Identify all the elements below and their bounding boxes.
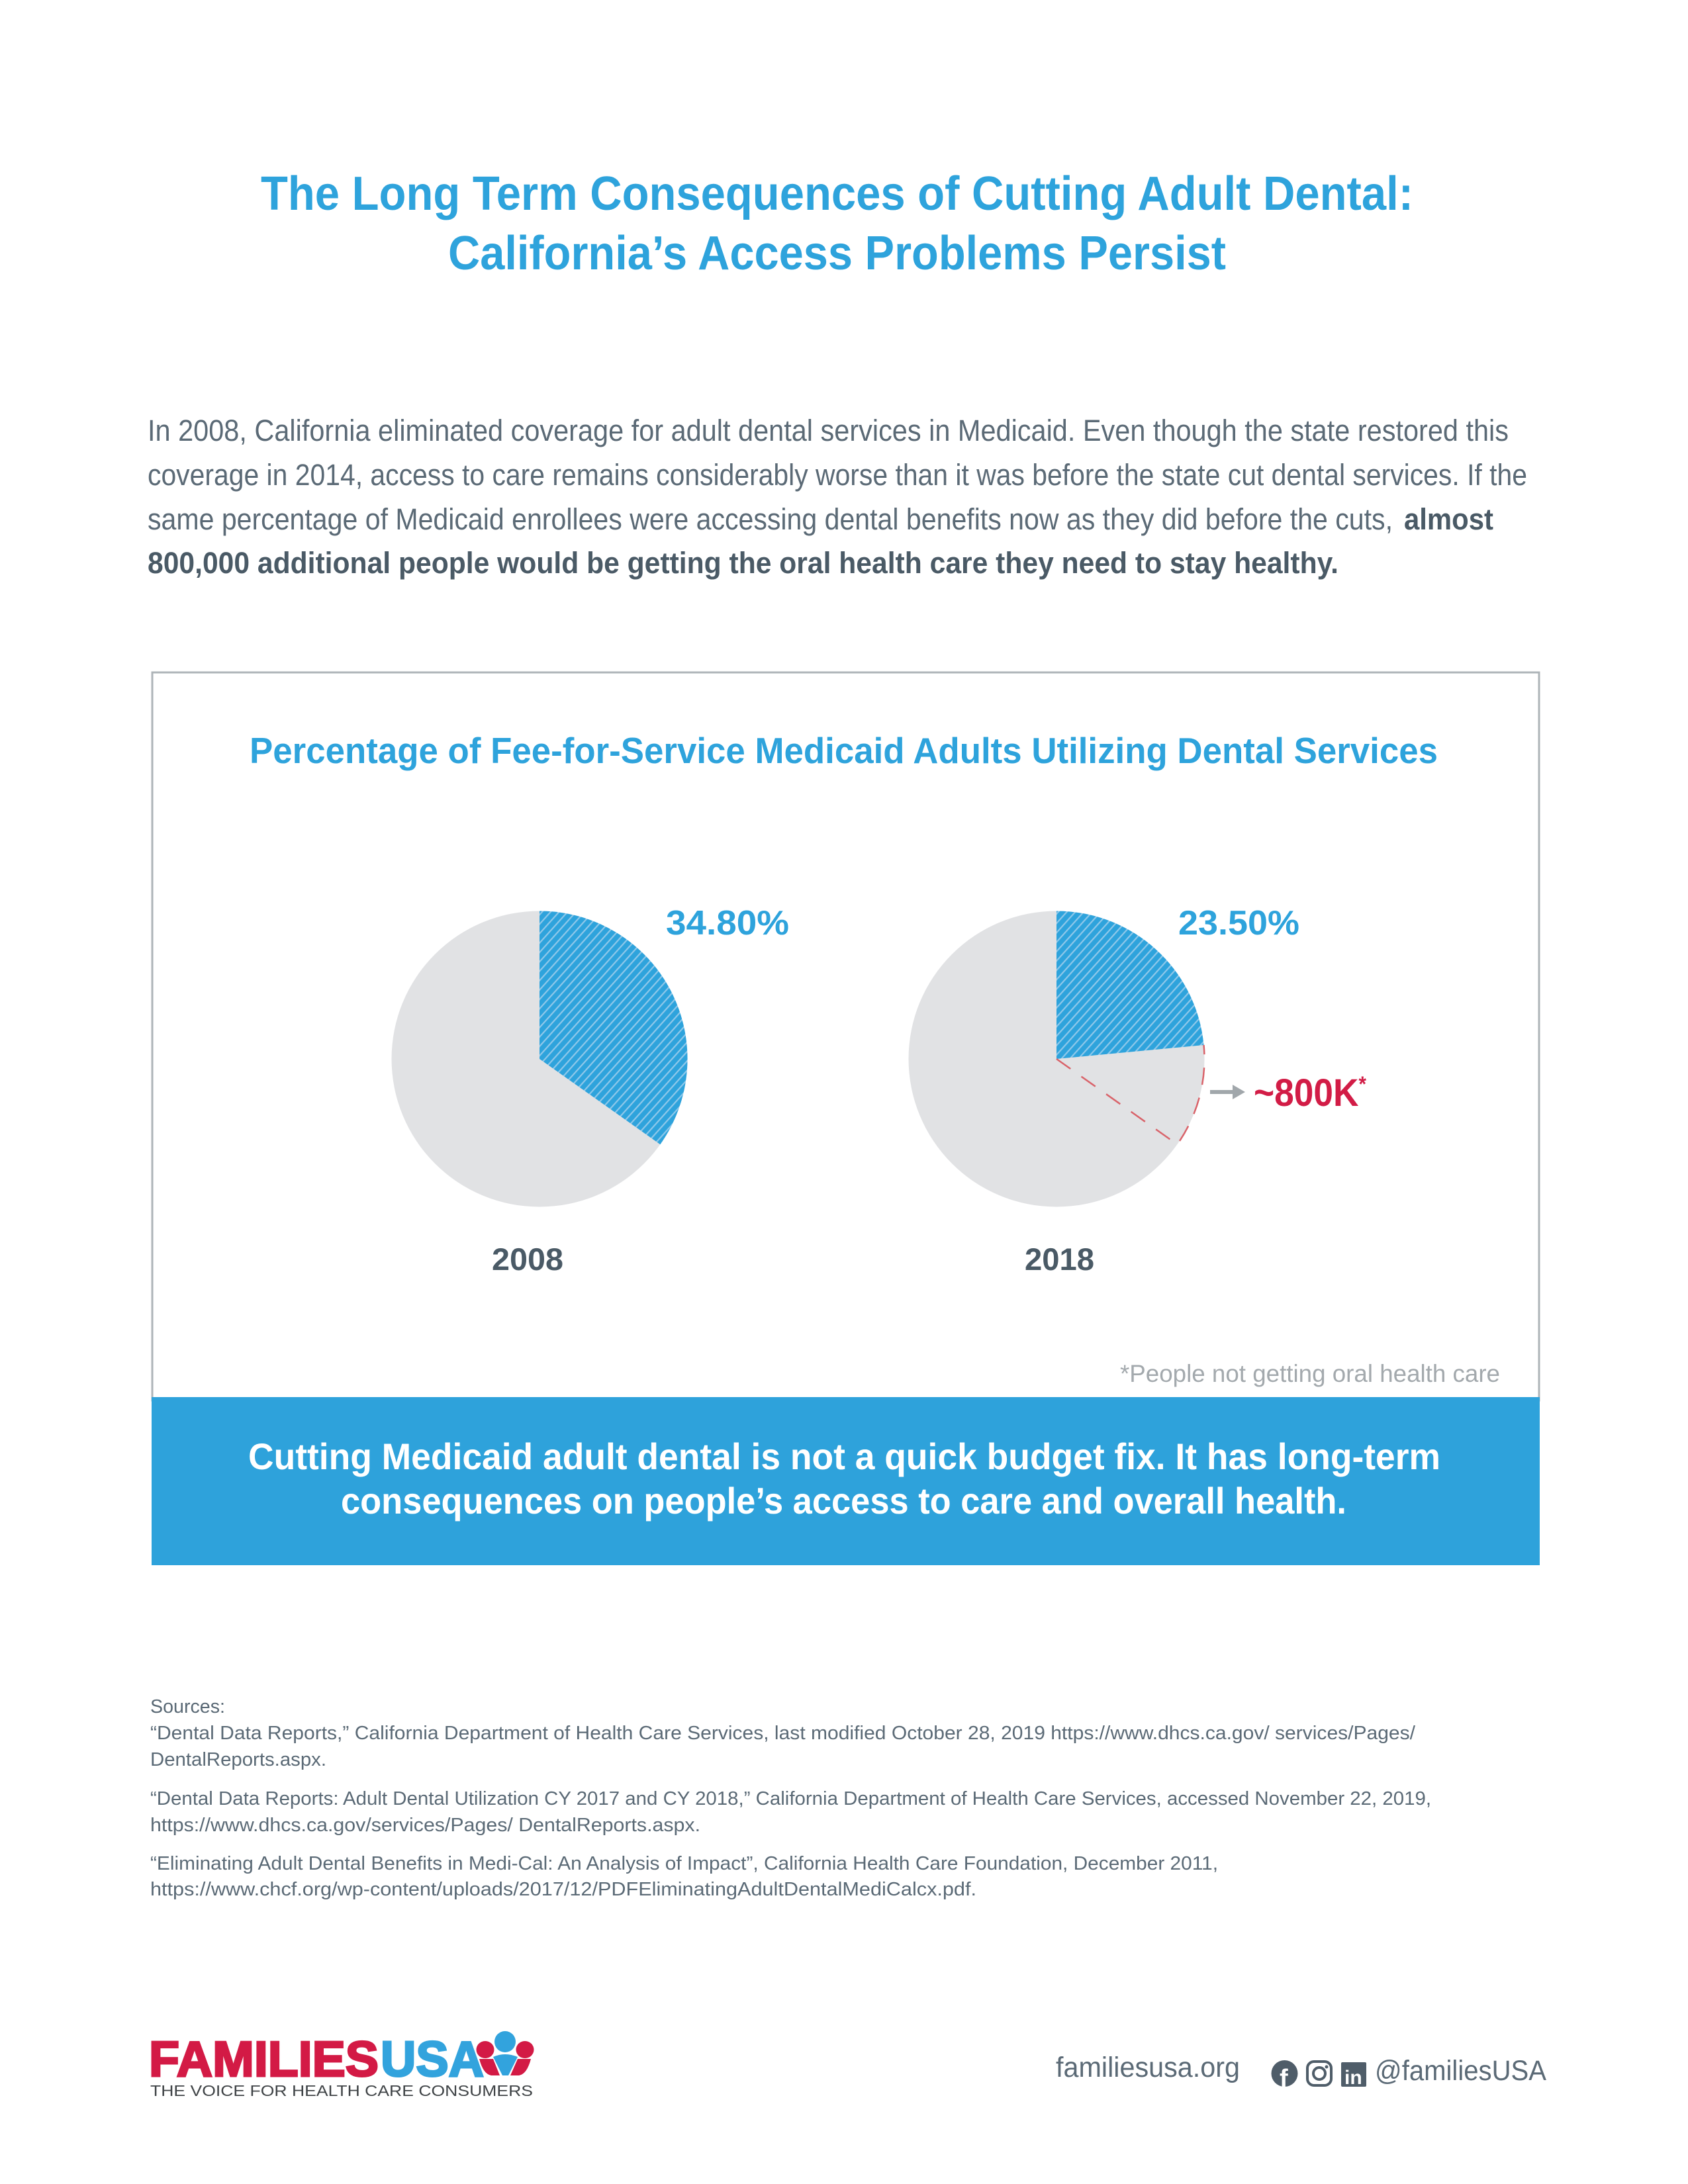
website: familiesusa.org (1056, 2052, 1240, 2083)
logo: Families USA: FAMILIES (149, 2031, 379, 2087)
callout: ~800K: * (1359, 1072, 1367, 1096)
intro paragraph: almost (1404, 502, 1493, 536)
footnote: *People not getting oral health care (1120, 1360, 1500, 1387)
logo: Families USA: USA (381, 2031, 484, 2087)
icon: instagram (1307, 2062, 1331, 2085)
callout band: consequences on people’s access to care and overall health. (341, 1480, 1346, 1522)
pie chart: 2008 (392, 904, 789, 1277)
logo: Families USA (149, 2031, 534, 2099)
intro paragraph (148, 414, 1527, 580)
chart heading: Percentage of Fee-for-Service Medicaid Adults Utilizing Dental Services (250, 730, 1438, 771)
value label: 23.50%: 23.50% (1178, 904, 1299, 942)
sources: “Dental Data Reports: Adult Dental Utilization CY 2017 and CY 2018,” California Department of Health Care Services, accessed November 22, 2019, (150, 1788, 1431, 1809)
intro paragraph: same percentage of Medicaid enrollees were accessing dental benefits now as they did before the cuts, (148, 502, 1393, 536)
title: The Long Term Consequences of Cutting Adult Dental: (261, 167, 1413, 220)
title: California’s Access Problems Persist (448, 227, 1226, 280)
icon: linkedin (1341, 2062, 1366, 2089)
arrow (1210, 1085, 1245, 1099)
icon: facebook: f (1280, 2065, 1288, 2093)
sources: “Eliminating Adult Dental Benefits in Medi-Cal: An Analysis of Impact”, California Health Care Foundation, December 2011, (150, 1853, 1218, 1874)
sources: Sources: (150, 1696, 225, 1717)
panel: chart box (152, 672, 1539, 1400)
callout band (152, 1397, 1540, 1565)
sources: https://www.chcf.org/wp-content/uploads/2017/12/PDFEliminatingAdultDentalMediCalcx.pdf. (150, 1879, 976, 1900)
sources: “Dental Data Reports,” California Department of Health Care Services, last modified October 28, 2019 https://www.dhcs.ca.gov/ services/Pages/ (150, 1723, 1416, 1744)
callout: ~800K: ~800K (1254, 1071, 1368, 1115)
sources (150, 1696, 1431, 1900)
title (261, 167, 1413, 280)
callout band: Cutting Medicaid adult dental is not a quick budget fix. It has long-term (248, 1435, 1440, 1477)
social handle: @familiesUSA (1375, 2055, 1546, 2087)
year label: 2018: 2018 (1025, 1242, 1094, 1277)
icon: facebook (1271, 2060, 1297, 2093)
sources: https://www.dhcs.ca.gov/services/Pages/ DentalReports.aspx. (150, 1815, 700, 1836)
pie chart: 2018 (908, 904, 1367, 1277)
icon: three people (477, 2031, 534, 2075)
intro paragraph: In 2008, California eliminated coverage for adult dental services in Medicaid. Even though the state restored this (148, 414, 1509, 447)
icon: linkedin: in (1344, 2067, 1362, 2089)
intro paragraph: 800,000 additional people would be getting the oral health care they need to stay healthy. (148, 546, 1338, 580)
year label: 2008: 2008 (492, 1242, 563, 1277)
logo: Families USA: THE VOICE FOR HEALTH CARE CONSUMERS (150, 2082, 533, 2099)
value label: 34.80%: 34.80% (666, 904, 789, 942)
sources: DentalReports.aspx. (150, 1749, 326, 1770)
intro paragraph: coverage in 2014, access to care remains considerably worse than it was before the state cut dental services. If the (148, 458, 1527, 492)
